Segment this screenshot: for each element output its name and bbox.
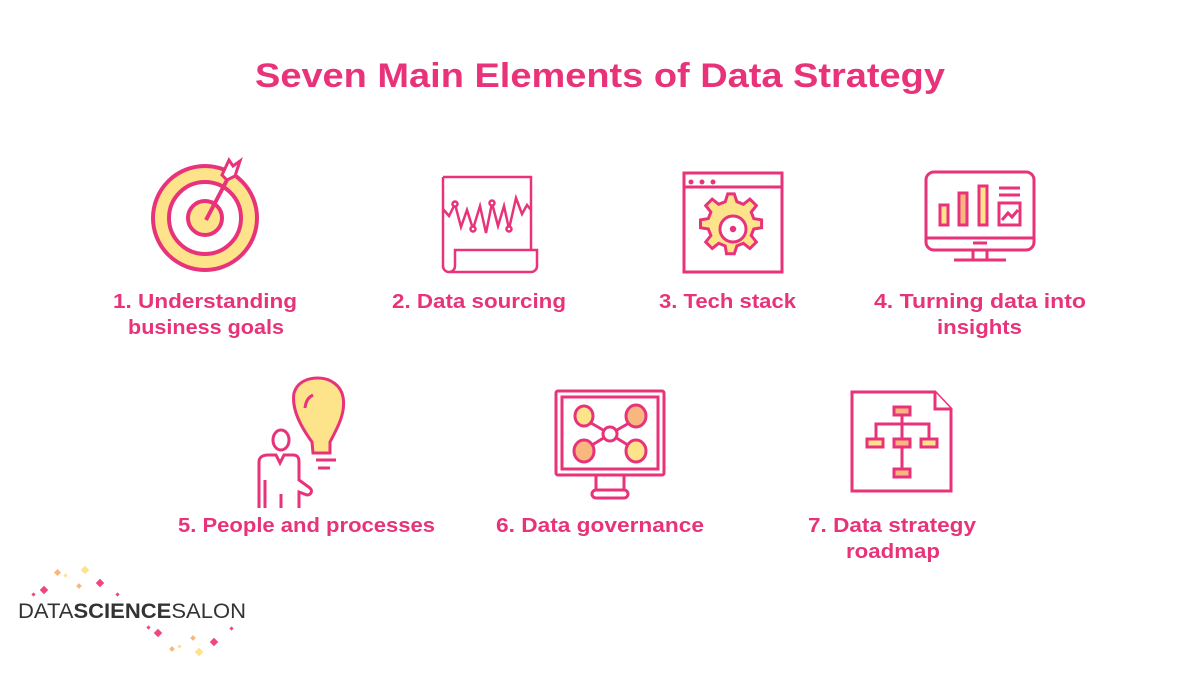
title: Seven Main Elements of Data Strategy <box>255 57 945 95</box>
icon: tech stack window with gear <box>684 173 782 272</box>
label 5: 5. People and processes <box>178 515 435 537</box>
label 1: business goals <box>128 317 284 339</box>
label 1: 1. Understanding <box>113 291 297 313</box>
icon: data sheet <box>443 177 537 272</box>
label 4: 4. Turning data into <box>874 291 1086 313</box>
logo: data science salon: DATASCIENCESALON <box>18 600 246 623</box>
logo: data science salon <box>18 566 246 656</box>
label 4: insights <box>937 317 1022 339</box>
icon: dashboard monitor <box>926 172 1034 260</box>
icon: governance monitor <box>556 391 664 498</box>
label 2: 2. Data sourcing <box>392 291 566 313</box>
label 7: roadmap <box>846 541 940 563</box>
icon: person with lightbulb <box>259 378 344 508</box>
icon: target <box>153 160 257 270</box>
label 7: 7. Data strategy <box>808 515 977 537</box>
icon: roadmap flowchart document <box>852 392 951 491</box>
label 6: 6. Data governance <box>496 515 704 537</box>
label 3: 3. Tech stack <box>659 291 797 313</box>
